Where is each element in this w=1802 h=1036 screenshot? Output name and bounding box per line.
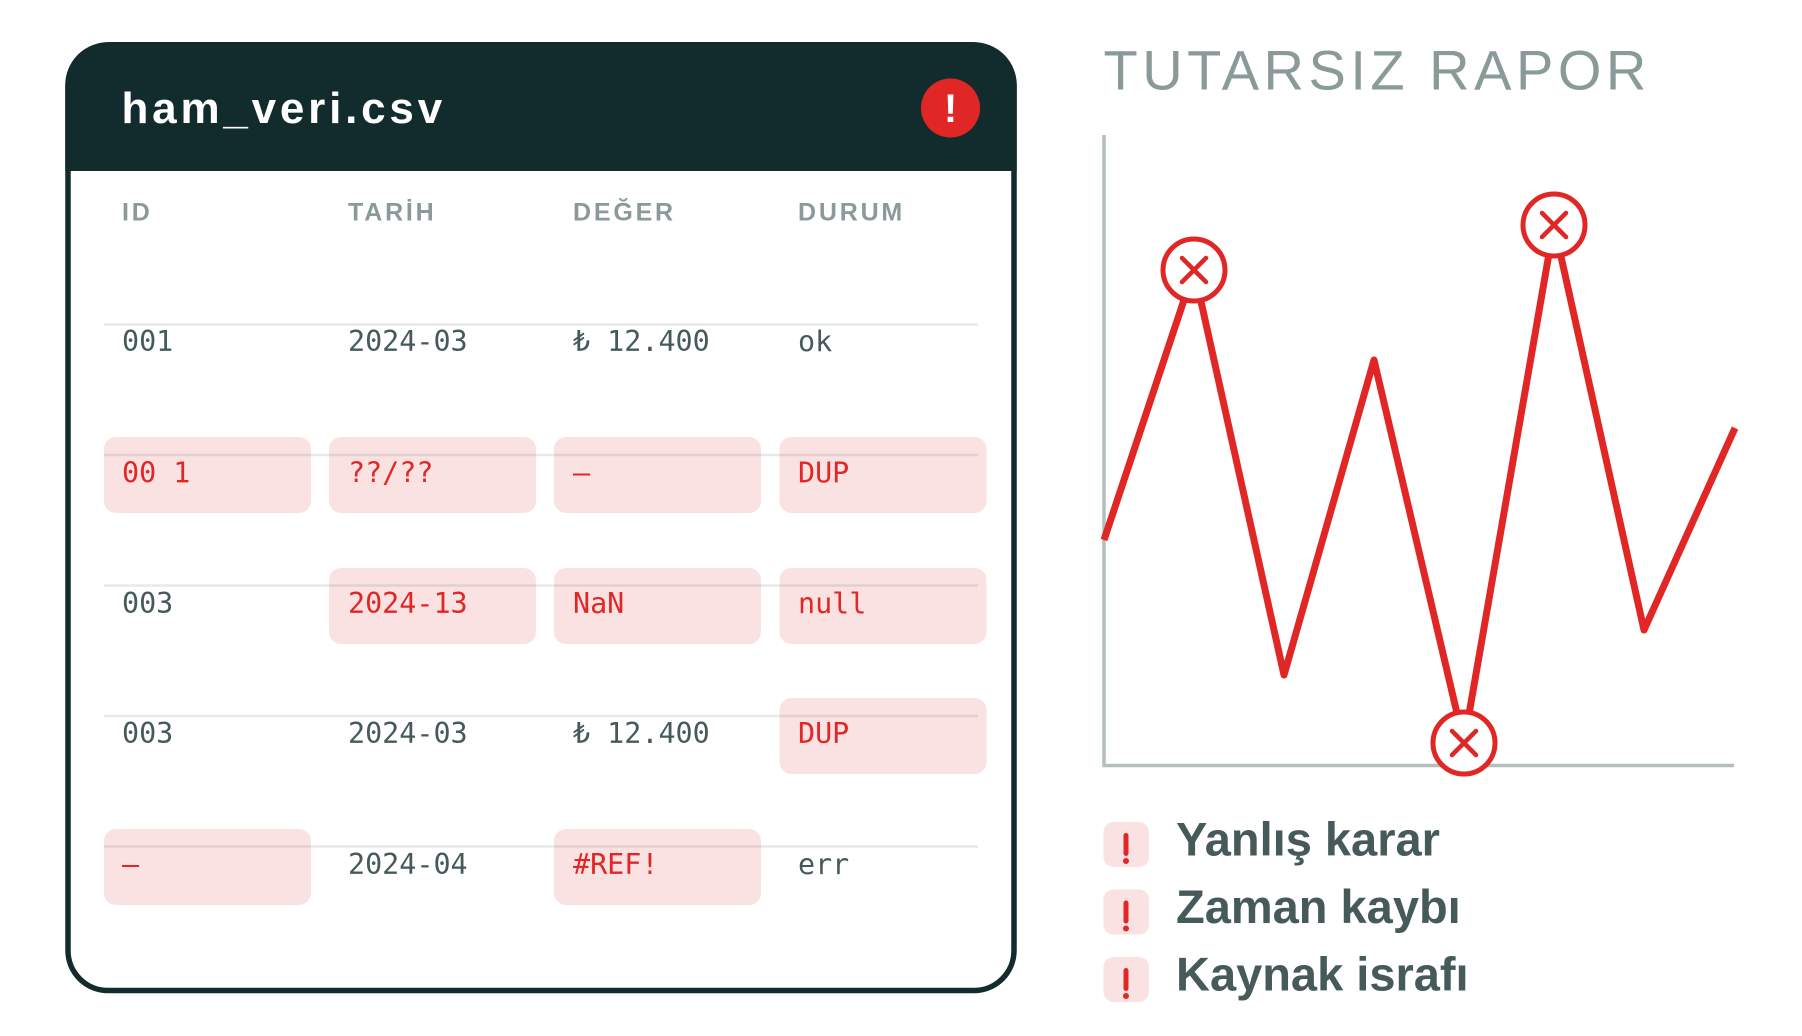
table row 2 — [122, 456, 849, 490]
card body — [68, 45, 1014, 990]
error marker 1 — [1163, 239, 1225, 301]
table row 4: 003 — [122, 717, 173, 750]
table row 1: ok — [798, 325, 832, 358]
table row 4: ₺ 12.400 — [573, 717, 710, 752]
table row 1 — [122, 325, 832, 360]
table row 2: — — [573, 456, 591, 490]
table row 3: NaN — [573, 587, 624, 620]
table row 3: 003 — [122, 587, 173, 620]
file name heading: ham_veri.csv — [122, 84, 446, 133]
table row 1: 001 — [122, 325, 173, 358]
item: lost time: Zaman kaybı — [1176, 880, 1461, 933]
table row 2: 00 1 — [122, 456, 190, 490]
table row 2: DUP — [798, 456, 849, 490]
heading: inconsistent report: TUTARSIZ RAPOR — [1104, 38, 1651, 102]
panel: raw data file card — [65, 42, 1017, 990]
table row 3: 2024-13 — [348, 587, 468, 620]
erratic data line — [1104, 225, 1735, 743]
error marker 3 — [1523, 194, 1585, 256]
item: wasted resources: Kaynak israfı — [1176, 948, 1469, 1000]
line chart — [1104, 135, 1735, 774]
chart axes — [1104, 135, 1734, 766]
table row 3: null — [798, 587, 866, 620]
table row 5: #REF! — [573, 848, 658, 881]
icon: alert badge: ! — [944, 87, 957, 131]
table row 1: ₺ 12.400 — [573, 325, 710, 360]
error cell highlights — [104, 437, 986, 905]
item: wrong decision: Yanlış karar — [1176, 812, 1440, 866]
table column headers: DURUM — [798, 199, 905, 227]
table row 1: 2024-03 — [348, 325, 468, 358]
table row 4 — [122, 717, 849, 752]
table row 2: ??/?? — [348, 456, 433, 490]
table row 3 — [122, 587, 866, 620]
table row 4: 2024-03 — [348, 717, 468, 750]
table column headers: ID — [122, 199, 153, 227]
table column headers: TARİH — [348, 199, 437, 227]
error marker 2 — [1433, 712, 1495, 774]
table row 5: 2024-04 — [348, 848, 468, 881]
table row 5 — [122, 848, 849, 881]
icon: alert badge — [921, 78, 980, 138]
table column headers: DEĞER — [573, 198, 676, 227]
table column headers — [122, 198, 905, 227]
card header bar — [65, 42, 1017, 171]
table row 5: err — [798, 848, 849, 881]
table row 5: — — [122, 848, 140, 881]
table row 4: DUP — [798, 717, 849, 750]
consequences list — [1104, 812, 1469, 1002]
